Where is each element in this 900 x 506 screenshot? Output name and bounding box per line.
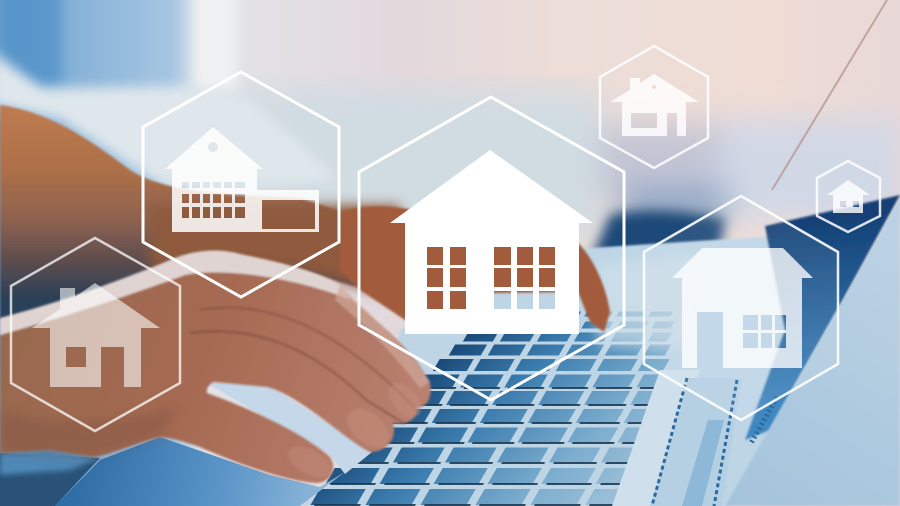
keyboard (310, 314, 735, 505)
laptop deck (300, 235, 790, 506)
icon: small house with window (32, 283, 160, 387)
knuckle highlight along top finger (335, 285, 430, 388)
icon: house (610, 74, 699, 136)
hexagon: centre with large house (359, 97, 624, 400)
laptop screen wedge (745, 195, 900, 440)
laptop lid line (772, 0, 887, 190)
hexagon: top right with house (600, 46, 708, 168)
laptop side strips and vents (612, 370, 777, 506)
pale upper right of keyboard (590, 255, 700, 350)
icon: tiny house (827, 180, 870, 213)
finger creases (190, 331, 405, 424)
sleeve and pale knuckle highlight (0, 251, 350, 335)
right table (725, 198, 900, 506)
hexagon: top left with house (143, 72, 339, 297)
table under hands (55, 437, 345, 506)
hexagon: right with house (644, 196, 838, 420)
icon: house with garage (165, 127, 319, 232)
fingertips (340, 401, 396, 455)
key shadows (314, 388, 692, 505)
hexagon: far right small with house (817, 161, 880, 232)
front hand (0, 251, 431, 484)
hexagon: bottom left with house (11, 238, 180, 431)
icon: house with door and window (672, 248, 813, 368)
back arm and hand (0, 105, 610, 332)
icon: large house (390, 150, 593, 334)
